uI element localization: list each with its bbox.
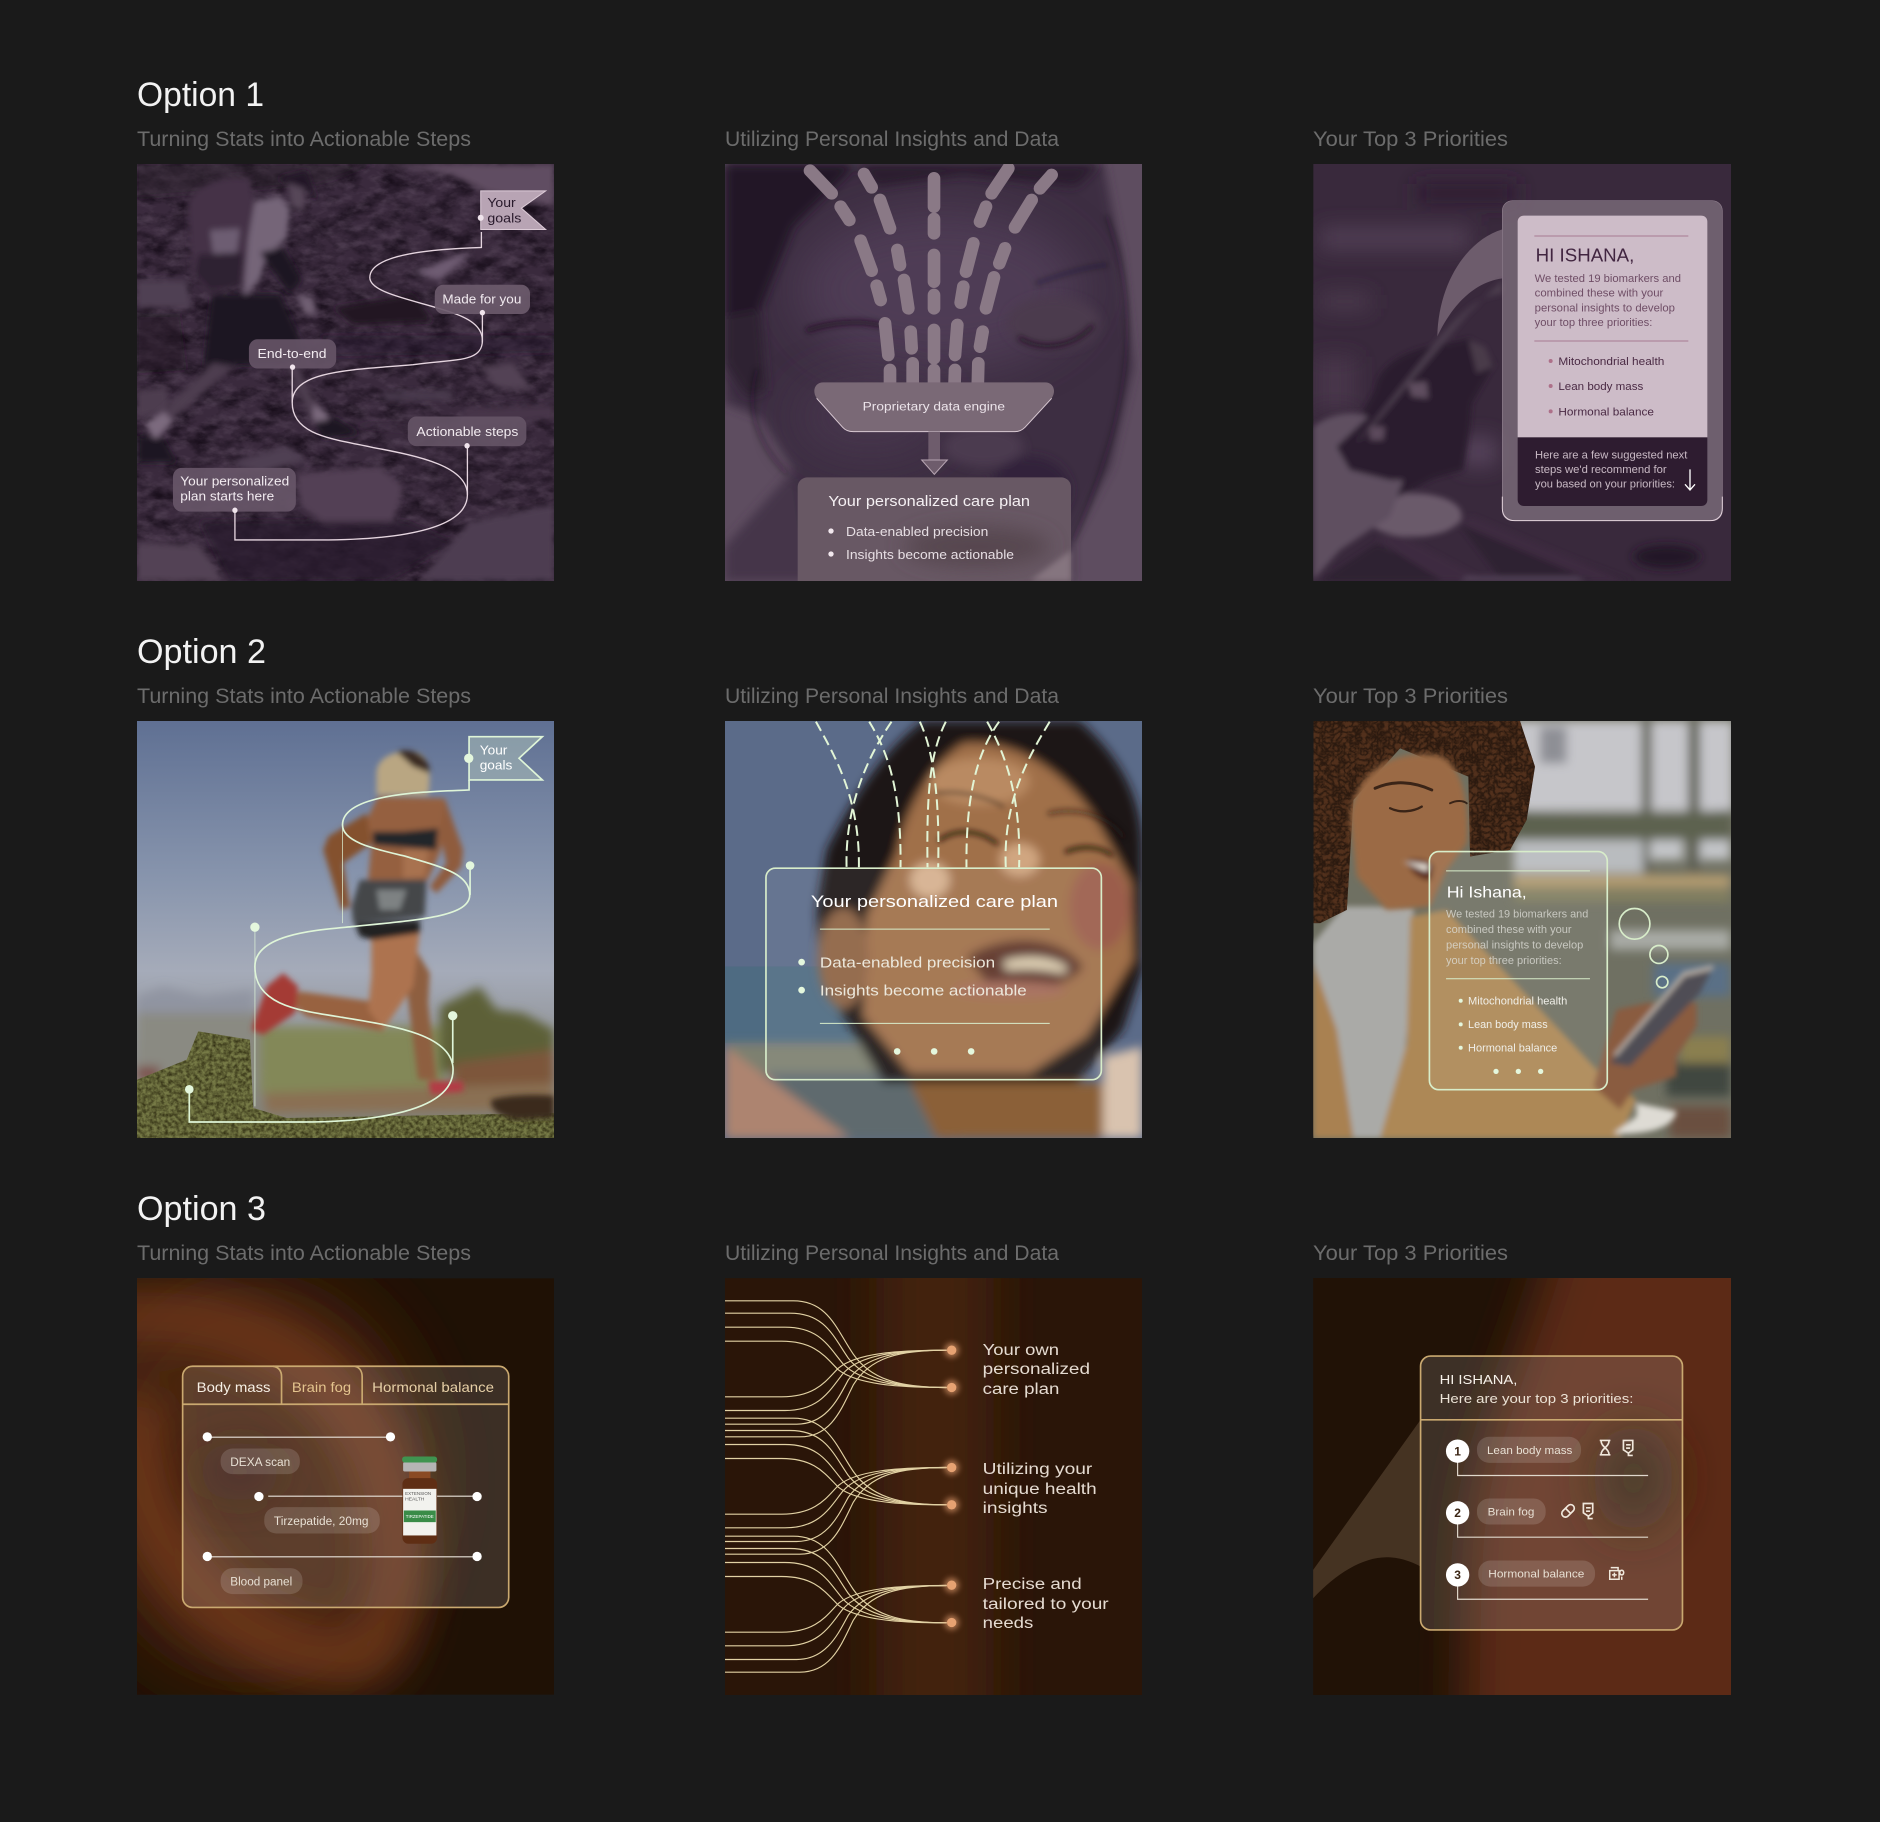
card: tabs and treatments: Tirzepatide, 20mg [274,1515,368,1528]
subheading: column 3 row 2: Your Top 3 Priorities [1313,685,1508,708]
card: inner light sheet: combined these with your [1535,288,1664,300]
pill: DEXA scan [221,1449,300,1474]
text: precise and tailored to your needs: Precise and [983,1576,1082,1593]
nodes: glowing endpoints [944,1343,959,1630]
row 2: brain fog [1446,1499,1648,1537]
subheading: column 3 row 1: Your Top 3 Priorities [1313,128,1508,151]
icon: medicine vial: HEALTH [405,1496,424,1501]
row 3: hormonal balance: 3 [1454,1568,1461,1582]
flag: your goals [478,191,546,230]
photo: woman reading phone [1314,721,1733,1139]
card: hi ishana: your top three priorities: [1446,955,1562,967]
icon: medicine bottle and spoon [1610,1568,1624,1580]
box: personalized care plan: Insights become actionable [846,548,1014,562]
text: utilizing your unique health insights [983,1461,1097,1517]
background: amber swirl [80,1272,554,1695]
subheading: column 2 row 1: Utilizing Personal Insights and Data [725,128,1059,151]
panel: care plan smile [725,721,1142,1138]
icon: medicine vial: TIRZEPATIDE [406,1514,434,1519]
card: personalized care plan: Data-enabled precision [820,954,995,971]
photo: hand holding phone [1313,164,1732,582]
card: dark footer: Here are a few suggested next [1535,449,1687,461]
tag: actionable steps [408,416,526,449]
card: inner light sheet: personal insights to develop [1535,302,1675,314]
path line [235,232,482,540]
text: utilizing your unique health insights: unique health [983,1481,1097,1498]
panel: hiker path [137,164,554,581]
text: your own personalized care plan: Your own [983,1342,1059,1359]
card: hi ishana: Mitochondrial health [1468,995,1567,1007]
panel: converging lines [725,1278,1142,1695]
tag: your personalized plan starts here [173,468,296,513]
box: personalized care plan: Your personalized care plan [828,494,1030,510]
card: personalized care plan: Your personalized care plan [811,892,1058,911]
box: proprietary data engine [814,382,1054,432]
tag: made for you: Made for you [442,291,521,307]
card: priorities: Here are your top 3 priorities: [1440,1392,1633,1406]
thought bubbles [1619,909,1668,988]
tag: your personalized plan starts here: plan starts here [180,488,274,504]
text: precise and tailored to your needs: tailored to your [983,1596,1109,1613]
photo: runner on hilltop [137,721,554,1138]
text: your own personalized care plan [983,1342,1090,1398]
heading: Option 3: Option 3 [137,1190,266,1228]
photo: face duotone [725,164,1143,582]
panel: runner path [137,721,554,1138]
heading: Option 1: Option 1 [137,76,264,114]
card: dark footer: you based on your priorities: [1535,479,1675,491]
photo: hiker on rocks [137,164,554,581]
icon: capsule [1560,1503,1576,1519]
subheading: column 1 row 1: Turning Stats into Actionable Steps [137,128,471,151]
dashed data streams [816,722,1050,867]
row 3: hormonal balance [1446,1561,1648,1599]
pill: blood panel [221,1568,303,1594]
card: hi ishana: combined these with your [1446,924,1572,936]
subheading: column 2 row 3: Utilizing Personal Insights and Data [725,1242,1059,1265]
icon: medicine vial: EXTENSION [405,1491,431,1496]
photo: smiling woman [725,721,1143,1140]
row 1: lean body mass [1446,1437,1648,1475]
tab: body mass: Body mass [197,1380,271,1395]
tag: end-to-end: End-to-end [258,346,327,361]
box: proprietary data engine: Proprietary data engine [863,400,1005,414]
card: inner light sheet: Mitochondrial health [1558,356,1664,368]
card: hi ishana: Hormonal balance [1468,1042,1557,1054]
subheading: column 3 row 3: Your Top 3 Priorities [1313,1242,1508,1265]
heading: Option 2: Option 2 [137,633,266,671]
text: precise and tailored to your needs [983,1576,1109,1632]
subheading: column 1 row 2: Turning Stats into Actionable Steps [137,685,471,708]
row 1: lean body mass: Lean body mass [1487,1445,1573,1457]
tag: your personalized plan starts here: Your personalized [180,473,289,489]
card: hi ishana: personal insights to develop [1446,939,1583,951]
text: your own personalized care plan: care plan [983,1381,1059,1398]
card: hi ishana: We tested 19 biomarkers and [1446,909,1588,921]
text: precise and tailored to your needs: needs [983,1615,1034,1632]
card: priorities [1421,1356,1682,1630]
panel: priorities woman with phone [1313,721,1731,1138]
panel: tabbed treatment card [137,1278,554,1695]
arrow: down [922,432,947,474]
hiker figure [138,171,360,463]
tag: made for you [435,285,530,315]
pill: tirzepatide [264,1507,380,1533]
icon: medicine vial [402,1457,437,1544]
box: personalized care plan: Data-enabled precision [846,525,988,539]
lines: data strands [725,1301,947,1672]
icon: IV bag [1583,1504,1593,1519]
row 2: brain fog: 2 [1454,1506,1461,1520]
background: amber glow [1313,1165,1880,1822]
greeting: HI ISHANA, [1440,1373,1517,1387]
box: personalized care plan [798,477,1071,581]
runner figure [252,750,463,1095]
card: outer glass frame [1502,201,1722,521]
icon: dna hourglass [1600,1440,1610,1455]
flag: your goals: Your [487,195,516,210]
flag: your goals: goals [487,210,521,225]
dashed data streams [810,168,1052,390]
card: personalized care plan: Insights become actionable [820,982,1027,999]
card: personalized care plan [766,868,1101,1080]
text: utilizing your unique health insights: insights [983,1500,1048,1517]
subheading: column 1 row 3: Turning Stats into Actionable Steps [137,1242,471,1265]
card: tabs and treatments: DEXA scan [230,1456,290,1469]
tag: actionable steps: Actionable steps [416,424,518,439]
card: tabs and treatments [183,1366,509,1607]
icon: IV bag [1623,1440,1633,1455]
path line with nodes [185,754,474,1122]
card: inner light sheet [1518,216,1707,437]
tab: hormonal balance: Hormonal balance [372,1380,494,1395]
flag: your goals: Your [480,743,507,757]
card: hi ishana: Lean body mass [1468,1019,1548,1031]
flag: your goals [469,737,542,780]
card: hi ishana [1429,852,1607,1090]
subheading: column 2 row 2: Utilizing Personal Insights and Data [725,685,1059,708]
card: inner light sheet: Lean body mass [1558,381,1644,393]
row 2: brain fog: Brain fog [1488,1507,1534,1519]
greeting: HI ISHANA, [1536,245,1634,266]
card: inner light sheet: Hormonal balance [1558,406,1654,418]
text: your own personalized care plan: personalized [983,1361,1090,1378]
row 1: lean body mass: 1 [1454,1444,1461,1458]
card: inner light sheet: your top three priorities: [1535,317,1652,329]
tag: end-to-end [249,339,336,370]
tab: brain fog: Brain fog [292,1380,351,1395]
card: hi ishana: Hi Ishana, [1447,885,1527,902]
card: dark footer [1518,437,1707,506]
text: utilizing your unique health insights: Utilizing your [983,1461,1092,1478]
card: dark footer: steps we'd recommend for [1535,464,1667,476]
card: tabs and treatments: Blood panel [230,1575,292,1588]
background: dark amber band [725,1198,1143,1765]
card: inner light sheet: We tested 19 biomarkers and [1535,273,1681,285]
icon: down arrow [1685,469,1695,490]
flag: your goals: goals [480,758,512,772]
panel: priorities phone card [1313,164,1731,581]
panel: top 3 priorities card [1313,1278,1731,1695]
panel: data engine face [725,164,1142,581]
row 3: hormonal balance: Hormonal balance [1488,1569,1584,1581]
